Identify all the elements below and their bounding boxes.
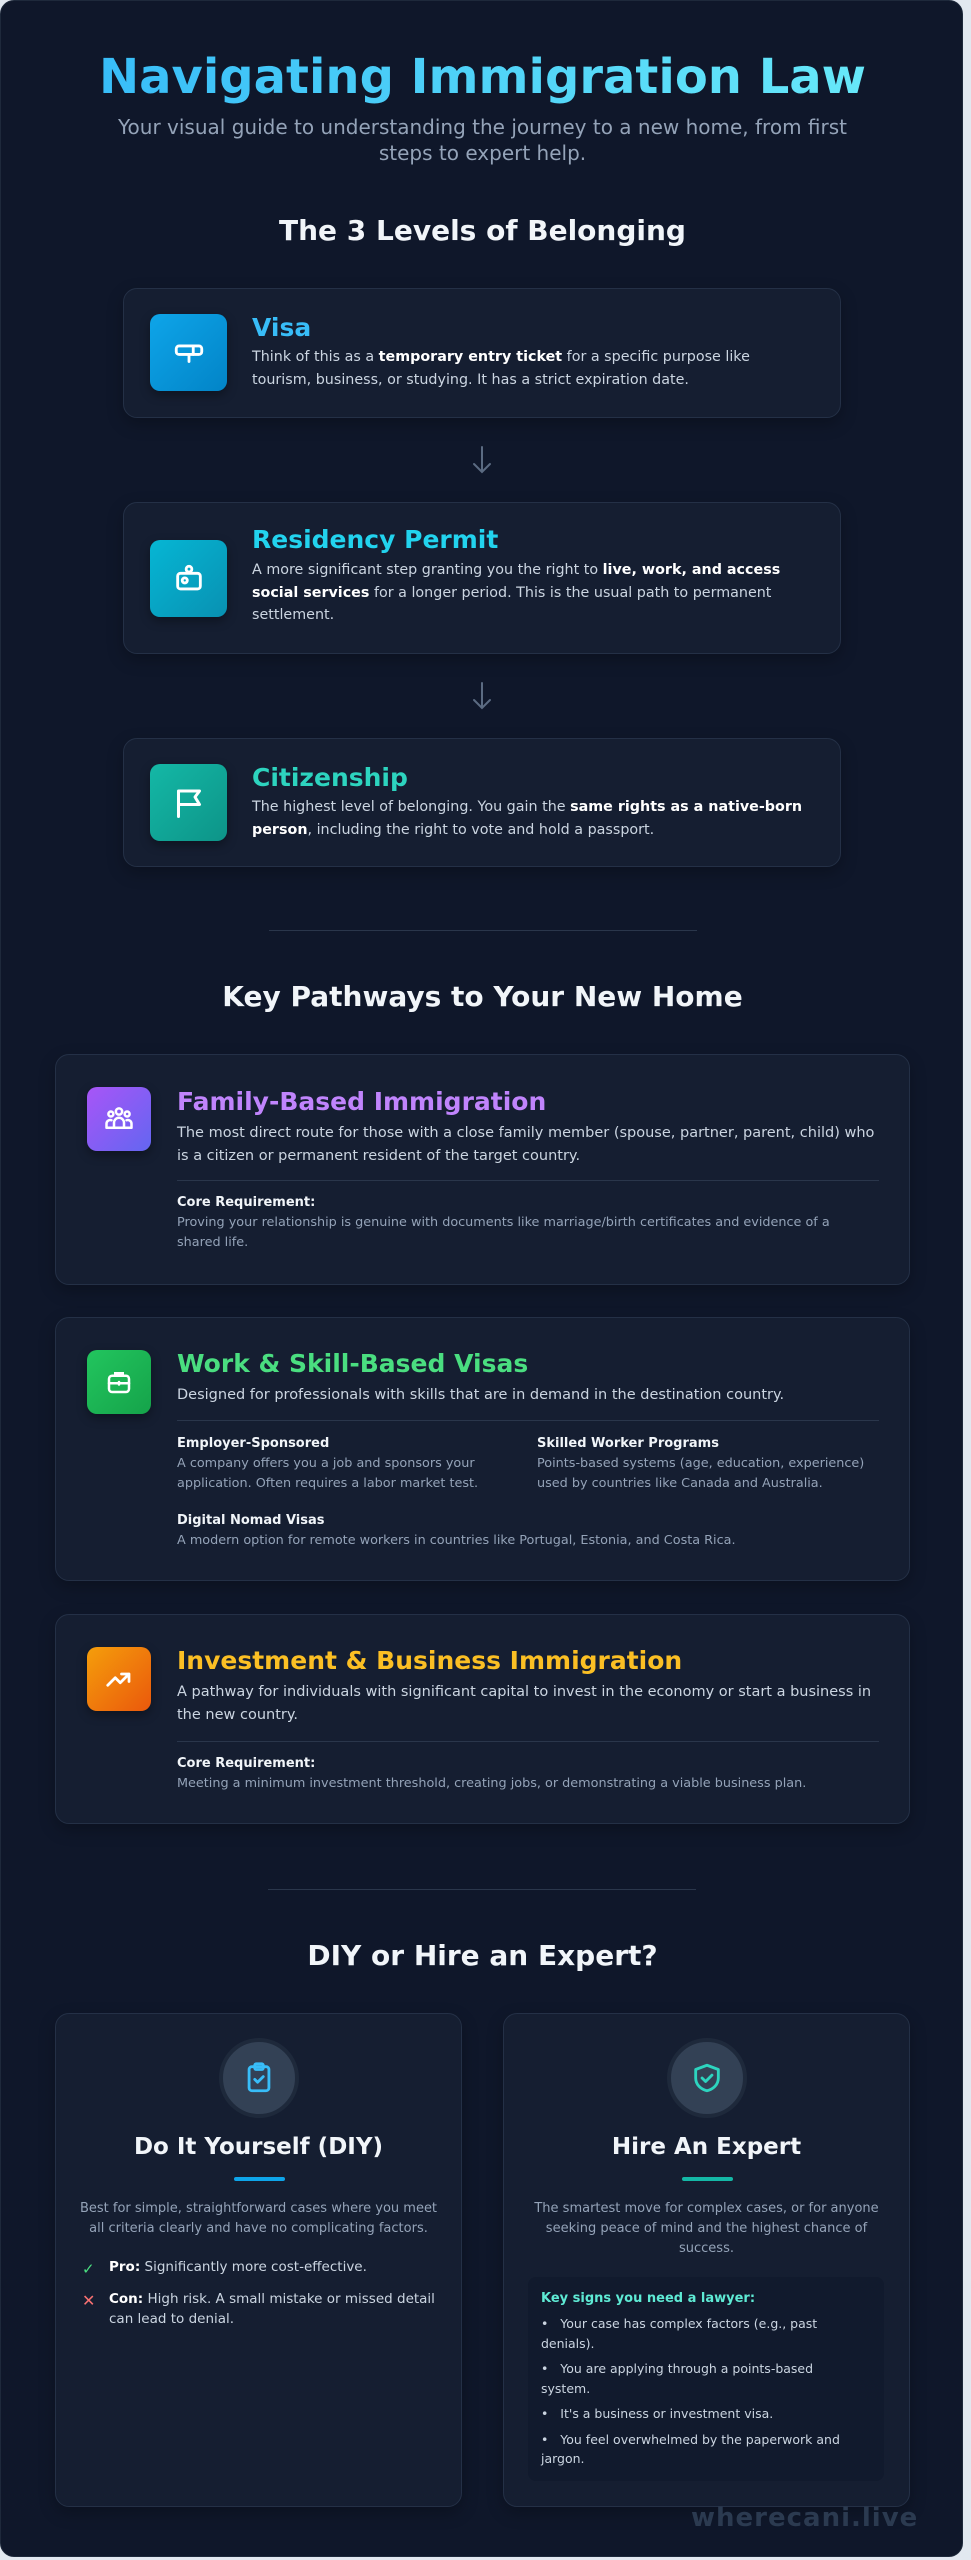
card: work [55, 1317, 910, 1581]
key signs list [540, 2316, 840, 2466]
citizenship text: person, including the right to vote and hold a passport. [252, 822, 654, 838]
family requirement [177, 1195, 830, 1250]
family title: Family-Based Immigration [177, 1087, 546, 1116]
family desc: The most direct route for those with a close family member (spouse, partner, parent, child) who [177, 1125, 874, 1141]
arrow 1 [473, 446, 491, 474]
key signs list: • You feel overwhelmed by the paperwork and [541, 2432, 840, 2446]
family requirement: Proving your relationship is genuine with documents like marriage/birth certificates and evidence of a [177, 1215, 830, 1230]
skilled worker programs: Points-based systems (age, education, experience) [537, 1456, 864, 1471]
card: family [55, 1054, 910, 1285]
subtitle: Your visual guide to understanding the journey to a new home, from first [118, 115, 847, 139]
card: citizenship [123, 738, 841, 867]
citizenship text: The highest level of belonging. You gain the same rights as a native-born [252, 799, 802, 815]
skilled worker programs: Skilled Worker Programs [537, 1436, 719, 1451]
family desc [176, 1125, 874, 1164]
DIY desc: all criteria clearly and have no complicating factors. [89, 2221, 428, 2236]
employer-sponsored: application. Often requires a labor market test. [177, 1476, 478, 1490]
key signs box [528, 2277, 884, 2481]
digital nomad [177, 1513, 736, 1548]
employer-sponsored: A company offers you a job and sponsors your [177, 1456, 475, 1471]
investment requirement: Core Requirement: [177, 1756, 315, 1771]
family requirement: shared life. [177, 1234, 248, 1250]
visa text: tourism, business, or studying. It has a strict expiration date. [252, 372, 689, 388]
con: ✕ [82, 2291, 95, 2310]
icon: family [87, 1087, 151, 1151]
card: visa [123, 288, 841, 418]
icon: residency [150, 540, 227, 617]
family requirement: Core Requirement: [177, 1195, 315, 1210]
residency text: A more significant step granting you the right to live, work, and access [252, 562, 780, 578]
visa title: Visa [252, 313, 311, 342]
expert title: Hire An Expert [612, 2134, 801, 2160]
icon: visa [150, 314, 227, 391]
title: Navigating Immigration Law [99, 49, 866, 105]
investment desc: A pathway for individuals with significant capital to invest in the economy or start a business in [177, 1684, 871, 1700]
DIY desc [80, 2201, 437, 2236]
skilled worker programs [537, 1436, 864, 1490]
investment requirement: Meeting a minimum investment threshold, creating jobs, or demonstrating a viable business plan. [177, 1776, 806, 1791]
con: can lead to denial. [109, 2311, 234, 2327]
residency text: social services for a longer period. This is the usual path to permanent [252, 584, 771, 600]
expert desc: The smartest move for complex cases, or for anyone [534, 2201, 879, 2216]
citizenship title: Citizenship [252, 763, 408, 792]
con [82, 2291, 435, 2327]
residency text [252, 562, 780, 623]
investment title: Investment & Business Immigration [177, 1646, 682, 1675]
DIY title: Do It Yourself (DIY) [134, 2134, 383, 2160]
key signs list: • It's a business or investment visa. [541, 2406, 773, 2421]
subtitle: steps to expert help. [379, 141, 586, 165]
visa text: Think of this as a temporary entry ticket for a specific purpose like [252, 349, 750, 365]
icon: clipboard [219, 2038, 299, 2118]
pro: Pro: Significantly more cost-effective. [109, 2259, 367, 2275]
employer-sponsored: Employer-Sponsored [177, 1436, 329, 1451]
digital nomad: A modern option for remote workers in countries like Portugal, Estonia, and Costa Rica. [177, 1533, 736, 1548]
employer-sponsored [177, 1436, 478, 1490]
icon: trend [87, 1647, 151, 1711]
visa text [252, 349, 750, 388]
key signs list: system. [541, 2380, 590, 2396]
key signs list: denials). [541, 2336, 595, 2350]
watermark: wherecani.live [691, 2503, 918, 2533]
icon: flag [150, 764, 227, 841]
card: investment [55, 1614, 910, 1824]
expert desc [534, 2201, 879, 2256]
pro: ✓ [82, 2260, 95, 2278]
card: expert [503, 2013, 910, 2507]
key signs list: • Your case has complex factors (e.g., past [541, 2316, 817, 2331]
icon: shield [667, 2038, 747, 2118]
heading: pathways: Key Pathways to Your New Home [222, 980, 743, 1013]
arrow 2 [473, 682, 491, 710]
heading: levels: The 3 Levels of Belonging [279, 214, 686, 247]
heading: DIY or expert: DIY or Hire an Expert? [307, 1939, 658, 1972]
skilled worker programs: used by countries like Canada and Australia. [537, 1476, 823, 1490]
investment desc: the new country. [177, 1707, 298, 1723]
DIY desc: Best for simple, straightforward cases where you meet [80, 2201, 437, 2216]
key signs list: jargon. [541, 2451, 585, 2466]
expert desc: success. [679, 2241, 734, 2256]
residency title: Residency Permit [252, 525, 498, 554]
key signs heading: Key signs you need a lawyer: [541, 2291, 755, 2306]
investment requirement [177, 1756, 806, 1791]
residency text: settlement. [252, 607, 334, 623]
investment desc [177, 1684, 871, 1723]
key signs list: • You are applying through a points-based [541, 2361, 813, 2376]
subtitle [118, 115, 847, 165]
con: Con: High risk. A small mistake or missed detail [109, 2291, 435, 2307]
work desc: Designed for professionals with skills that are in demand in the destination country. [177, 1387, 784, 1403]
family desc: is a citizen or permanent resident of the target country. [177, 1148, 580, 1164]
expert desc: seeking peace of mind and the highest chance of [546, 2221, 867, 2236]
digital nomad: Digital Nomad Visas [177, 1513, 324, 1528]
card: DIY [55, 2013, 462, 2507]
citizenship text [252, 799, 802, 838]
card: residency [123, 502, 841, 654]
work title: Work & Skill-Based Visas [177, 1349, 528, 1378]
icon: briefcase [87, 1350, 151, 1414]
